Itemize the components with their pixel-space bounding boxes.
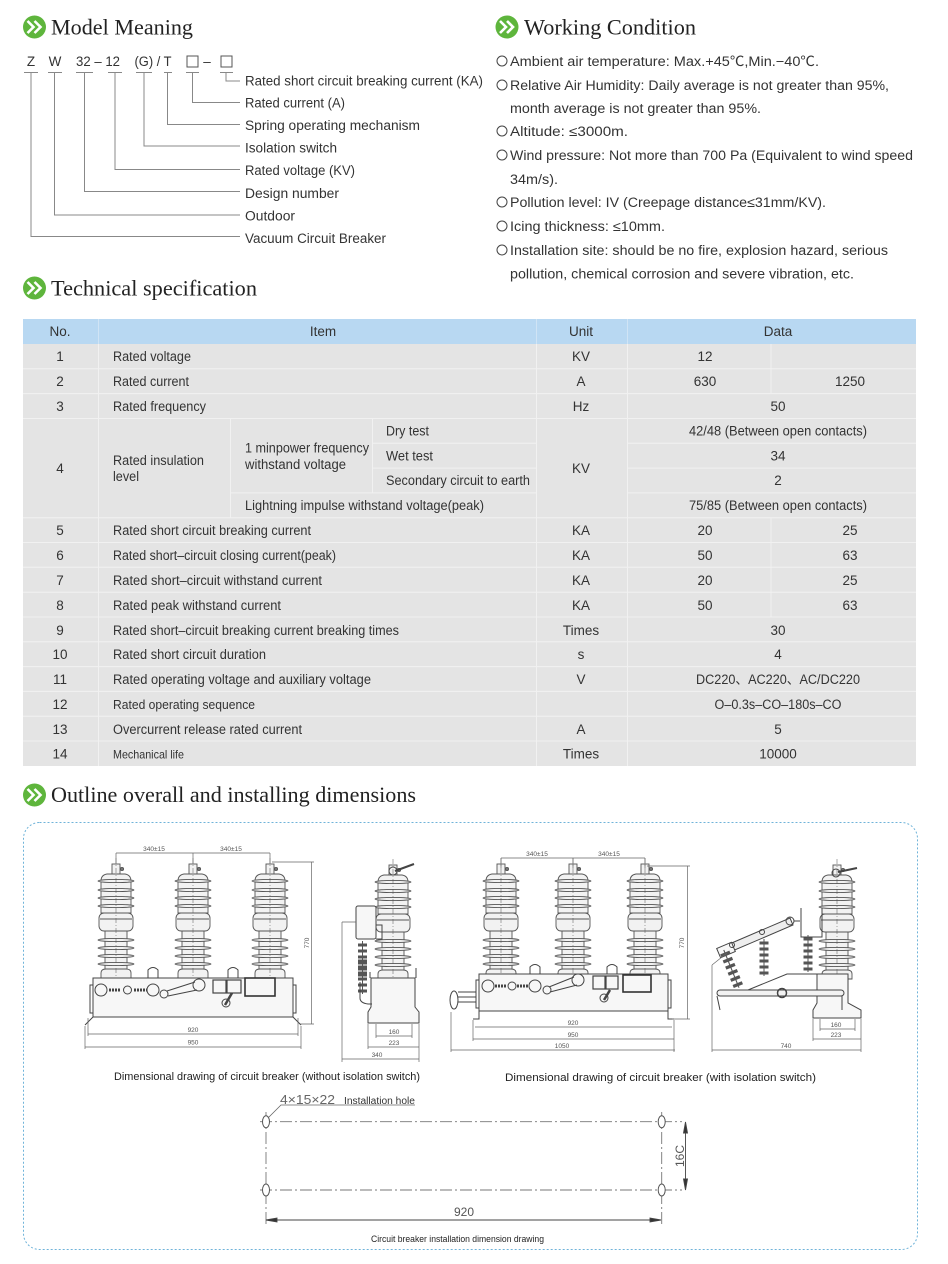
model code labels: Outdoor [245, 208, 296, 224]
column: Unit: KA [572, 548, 590, 563]
column: Item: Rated short–circuit breaking current breaking times [113, 623, 399, 638]
model code labels: Isolation switch [245, 140, 337, 156]
column: Data: 1250 [835, 374, 865, 389]
column: Data: O–0.3s–CO–180s–CO [714, 697, 842, 712]
drawing: breaker front view without isolation switch: 340±15 [143, 846, 165, 853]
drawing: breaker side view with isolation switch [712, 859, 861, 1052]
tree connector lines [24, 72, 240, 236]
column: No.: 1 [56, 349, 64, 364]
column: Data: 4 [774, 647, 782, 662]
column: Item: withstand voltage [244, 457, 346, 472]
breaker housing [450, 964, 674, 1019]
dimension lines [342, 922, 419, 1062]
list bullets [497, 56, 507, 255]
column: Item: Rated short–circuit closing current(peak) [113, 548, 336, 563]
column: No.: 13 [52, 722, 68, 737]
column: No.: 3 [56, 399, 64, 414]
column: Item: Rated peak withstand current [113, 598, 281, 613]
column: Data: 20 [697, 573, 713, 588]
panel: dashed dimensions frame [24, 822, 918, 1250]
model code letters: – [203, 54, 211, 69]
column: Data: 63 [842, 548, 858, 563]
column: Data: 34 [770, 448, 786, 464]
model code letters [27, 54, 232, 69]
column: Item: Rated current [113, 374, 189, 389]
drawing: breaker side view without isolation switch: 160 [389, 1029, 400, 1036]
caption: installation dimension drawing: Circuit breaker installation dimension drawing [371, 1234, 544, 1244]
drawing: breaker front view with isolation switch: 340±15 [526, 851, 548, 858]
column: Data: 30 [770, 623, 786, 638]
column: No.: 11 [53, 672, 67, 687]
drawing: breaker front view with isolation switch: 1050 [555, 1043, 570, 1050]
table grid lines [23, 344, 916, 766]
table header: Item [310, 324, 336, 339]
column: No.: 4 [56, 461, 64, 476]
working condition list: Pollution level: IV (Creepage distance≤31mm/KV). [510, 195, 826, 210]
working condition list [497, 54, 913, 282]
column: Data: 10000 [759, 746, 797, 762]
drawing: breaker front view without isolation switch: 950 [188, 1040, 199, 1046]
column: No.: 2 [56, 374, 64, 389]
model code letters: (G) / T [134, 54, 172, 69]
drawing: installation hole layout: 920 [454, 1205, 474, 1219]
housing, arm and small insulators [717, 868, 861, 1018]
table body background [23, 344, 916, 766]
heading: Model Meaning: Model Meaning [51, 14, 193, 40]
column: No.: 8 [56, 598, 64, 613]
model code labels: Rated voltage (KV) [245, 163, 355, 178]
drawing: breaker front view with isolation switch [450, 851, 690, 1052]
centre lines [260, 1112, 682, 1226]
column: Unit: V [576, 672, 586, 687]
icon: green double chevron [23, 16, 46, 38]
column: Unit: A [576, 722, 586, 737]
column: Item: Rated insulation [113, 453, 204, 468]
column: No.: 12 [52, 697, 68, 712]
working condition list: Altitude: ≤3000m. [510, 124, 628, 139]
column: No. [52, 349, 68, 762]
drawing: breaker front view with isolation switch: 770 [679, 937, 686, 948]
drawing: breaker side view with isolation switch: 160 [831, 1022, 842, 1029]
drawing: installation hole layout: 16C [673, 1145, 687, 1167]
drawing: installation hole layout: Installation hole [344, 1096, 415, 1107]
column: Item [113, 349, 530, 762]
column: Data: 75/85 (Between open contacts) [689, 498, 867, 513]
column: Item: Dry test [386, 424, 429, 438]
drawing: breaker side view without isolation switch [342, 859, 419, 1062]
dimension lines [712, 953, 861, 1052]
model code labels: Spring operating mechanism [245, 118, 420, 133]
column: Item: Secondary circuit to earth [386, 473, 530, 488]
model code diagram [24, 54, 483, 246]
drawing: breaker front view without isolation switch: 920 [188, 1027, 199, 1034]
column: Item: Rated short–circuit withstand current [113, 573, 322, 588]
column: Data: DC220、AC220、AC/DC220 [696, 672, 860, 687]
drawing: breaker side view without isolation switch: 340 [372, 1052, 383, 1059]
column: Item: Rated frequency [113, 399, 206, 414]
table header [23, 319, 916, 344]
column: Unit: A [576, 374, 586, 389]
column: Data: 5 [774, 722, 782, 737]
caption: with isolation switch: Dimensional drawing of circuit breaker (with isolation switch) [505, 1072, 816, 1084]
column: Data: 50 [697, 598, 713, 613]
column: Unit: KV [572, 461, 590, 476]
column: No.: 10 [52, 647, 68, 662]
column: Data: 25 [842, 573, 858, 588]
column: Unit: KA [572, 598, 590, 613]
dimension arrows [266, 1122, 688, 1222]
model code letters: W [49, 54, 62, 69]
side housing and arm [356, 864, 419, 1023]
model code labels [245, 74, 483, 246]
model code labels: Rated current (A) [245, 96, 345, 110]
column: Item: Wet test [386, 448, 433, 464]
model code letters: 32 – 12 [76, 54, 120, 69]
icon: green double chevron [23, 276, 46, 300]
column: Unit: Times [563, 746, 599, 762]
column: Data: 50 [697, 548, 713, 563]
dimension lines [85, 853, 314, 1049]
drawing: breaker front view without isolation switch: 340±15 [220, 846, 242, 853]
column: Unit [563, 349, 599, 762]
column: Item: Rated short circuit breaking current [113, 523, 311, 538]
drawing: breaker front view with isolation switch: 340±15 [598, 851, 620, 858]
column: Item: Rated voltage [113, 349, 191, 364]
column: Data: 50 [770, 399, 786, 414]
drawing: installation hole layout [260, 1092, 688, 1226]
dimension lines [451, 858, 690, 1052]
column: Item: Lightning impulse withstand voltage(peak) [245, 498, 484, 513]
drawing: breaker front view with isolation switch: 950 [568, 1032, 579, 1039]
model code labels: Vacuum Circuit Breaker [245, 231, 387, 246]
caption: without isolation switch: Dimensional drawing of circuit breaker (without isolation switch) [114, 1071, 420, 1083]
table header: Unit [569, 324, 593, 339]
column: Unit: Hz [573, 399, 589, 414]
column: No.: 7 [56, 573, 64, 588]
working condition list: Relative Air Humidity: Daily average is not greater than 95%, [510, 78, 889, 93]
working condition list: Ambient air temperature: Max.+45℃,Min.−40℃. [510, 54, 819, 69]
table header: No. [49, 324, 71, 339]
drawing: breaker side view without isolation switch: 223 [389, 1040, 400, 1047]
model code letters: Z [27, 54, 35, 69]
heading: Technical specification: Technical specification [51, 276, 257, 300]
mounting holes [262, 1116, 665, 1196]
working condition list: Installation site: should be no fire, explosion hazard, serious [510, 243, 888, 258]
column: No.: 6 [56, 548, 64, 563]
column: Data: 2 [774, 473, 782, 488]
column: Item: Rated operating voltage and auxiliary voltage [113, 672, 371, 687]
column: Item: Mechanical life [113, 748, 184, 762]
breaker housing [85, 968, 301, 1025]
working condition list: Wind pressure: Not more than 700 Pa (Equivalent to wind speed [510, 148, 913, 163]
drawing: breaker side view with isolation switch: 223 [831, 1032, 842, 1039]
technical specification table [23, 319, 916, 766]
drawing: installation hole layout: 4×15×22 [280, 1092, 335, 1107]
drawing: breaker side view with isolation switch: 740 [781, 1043, 792, 1050]
column: Item: Overcurrent release rated current [113, 722, 302, 737]
hole leader line [268, 1105, 415, 1118]
drawing: breaker front view without isolation switch: 770 [304, 937, 311, 948]
column: No.: 9 [56, 623, 64, 638]
model code labels: Rated short circuit breaking current (KA) [245, 74, 483, 88]
column: Item: 1 minpower frequency [245, 440, 369, 456]
drawing: breaker front view without isolation switch [85, 846, 314, 1049]
column: Item: Rated operating sequence [113, 698, 255, 712]
icon: green double chevron [496, 16, 518, 38]
column: Data [689, 349, 867, 762]
column: Unit: s [578, 647, 585, 662]
working condition list: month average is not greater than 95%. [510, 101, 761, 116]
heading: Working Condition: Working Condition [524, 14, 696, 40]
column: Data: 42/48 (Between open contacts) [689, 424, 867, 438]
working condition list: pollution, chemical corrosion and severe vibration, etc. [510, 266, 854, 282]
column: No.: 5 [56, 523, 64, 538]
column: Data: 63 [842, 598, 858, 613]
column: No.: 14 [52, 746, 68, 762]
column: Unit: KA [572, 573, 590, 588]
column: Unit: KV [572, 349, 590, 364]
column: Data: 630 [694, 374, 716, 389]
column: Data: 20 [697, 523, 713, 538]
drawing: breaker front view with isolation switch: 920 [568, 1020, 579, 1027]
column: Data: 25 [842, 523, 858, 538]
working condition list: 34m/s). [510, 172, 558, 187]
column: Data: 12 [697, 349, 713, 364]
column: Unit: KA [572, 523, 590, 538]
model code labels: Design number [245, 186, 340, 201]
column: Unit: Times [563, 623, 599, 638]
column: Item: Rated short circuit duration [113, 647, 266, 662]
working condition list: Icing thickness: ≤10mm. [510, 219, 665, 234]
column: Item: level [113, 469, 139, 484]
heading: Outline overall and installing dimensions: Outline overall and installing dimensions [51, 782, 416, 807]
table header: Data [764, 324, 793, 339]
icon: green double chevron [23, 784, 46, 806]
